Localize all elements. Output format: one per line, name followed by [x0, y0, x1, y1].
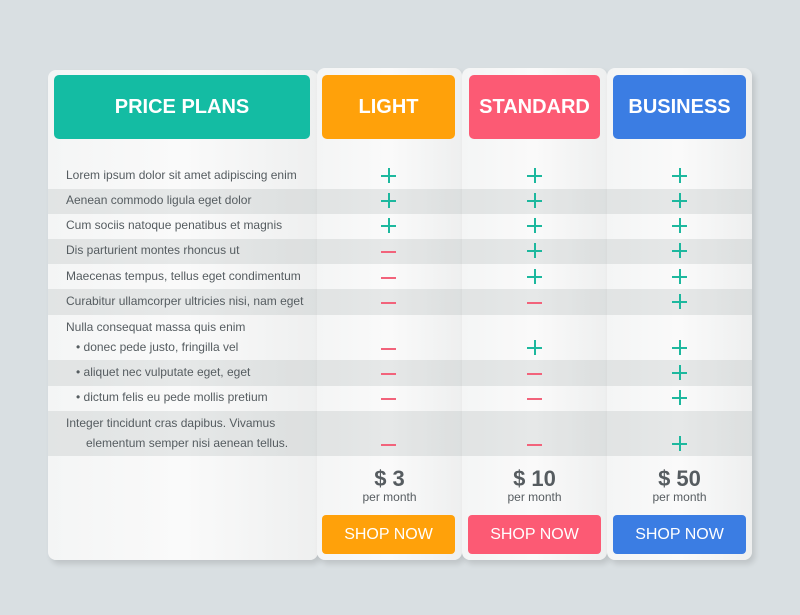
text block: feature list: Nulla consequat massa quis enim	[66, 320, 245, 334]
marks: business column	[672, 168, 687, 451]
button: standard shop now: SHOP NOW	[490, 526, 579, 542]
button: business shop now: SHOP NOW	[635, 526, 724, 542]
text block: feature list: Cum sociis natoque penatibus et magnis	[66, 218, 282, 232]
price: business	[652, 466, 707, 504]
text block: feature list	[66, 168, 304, 450]
price: standard: $ 10	[513, 466, 556, 491]
price: standard: per month	[507, 490, 562, 504]
text block: feature list: • aliquet nec vulputate eget, eget	[76, 365, 250, 379]
price: business: $ 50	[658, 466, 701, 491]
text block: feature list: • dictum felis eu pede mollis pretium	[76, 390, 268, 404]
heading: price plans: PRICE PLANS	[115, 96, 249, 118]
price: standard	[507, 466, 562, 504]
text block: feature list: elementum semper nisi aenean tellus.	[86, 436, 288, 450]
button: light shop now	[322, 515, 455, 554]
price: light: $ 3	[374, 466, 405, 491]
panel: features card	[48, 70, 318, 560]
text block: feature list: Maecenas tempus, tellus eget condimentum	[66, 269, 301, 283]
price: light: per month	[362, 490, 417, 504]
heading: standard	[469, 75, 600, 139]
panel: light card	[317, 68, 462, 560]
text block: feature list: • donec pede justo, fringilla vel	[76, 340, 238, 354]
text block: feature list: Curabitur ullamcorper ultricies nisi, nam eget	[66, 294, 303, 308]
heading: light: LIGHT	[358, 96, 418, 118]
text block: feature list: Integer tincidunt cras dapibus. Vivamus	[66, 416, 275, 430]
text block: feature list: Dis parturient montes rhoncus ut	[66, 243, 239, 257]
heading: price plans	[54, 75, 310, 139]
heading: business	[613, 75, 746, 139]
marks: light column	[381, 168, 396, 446]
heading: business: BUSINESS	[628, 96, 731, 118]
heading: standard: STANDARD	[479, 96, 590, 118]
price: light	[362, 466, 417, 504]
heading: light	[322, 75, 455, 139]
price: business: per month	[652, 490, 707, 504]
text block: feature list: Lorem ipsum dolor sit amet adipiscing enim	[66, 168, 297, 182]
marks: standard column	[527, 168, 542, 446]
button: standard shop now	[468, 515, 601, 554]
button: light shop now: SHOP NOW	[344, 526, 433, 542]
text block: feature list: Aenean commodo ligula eget dolor	[66, 193, 251, 207]
panel: standard card	[462, 68, 607, 560]
panel: business card	[607, 68, 752, 560]
button: business shop now	[613, 515, 746, 554]
